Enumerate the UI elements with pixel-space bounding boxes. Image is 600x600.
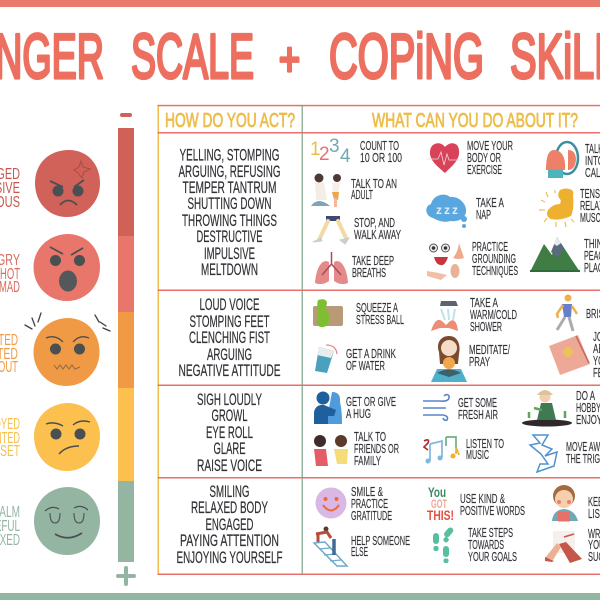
icon: footsteps	[433, 526, 455, 563]
icon: talk to adult	[311, 174, 341, 207]
behaviours: frustrated	[178, 296, 280, 380]
icon: you got this: You	[428, 484, 446, 500]
icon: nap cloud	[426, 195, 467, 228]
icon: journal	[549, 335, 590, 375]
face: annoyed	[34, 403, 100, 471]
text: move away from the trigger	[566, 440, 600, 466]
icon: gardening person	[522, 390, 572, 426]
text: move your body: MOVE YOUR	[467, 139, 513, 153]
text: grounding techniques	[472, 240, 518, 278]
icon: numbers 1234: 1	[310, 139, 321, 160]
title: SCALE	[131, 22, 254, 92]
text: hug: A HUG	[346, 407, 371, 421]
table frame and grid	[158, 105, 600, 575]
behaviours: frustrated: CLENCHING FIST	[189, 329, 270, 347]
text: help someone else	[351, 534, 410, 559]
text: journal about your feelings	[593, 330, 600, 380]
text: stop and walk away	[354, 216, 401, 242]
icon: numbers 1234: 3	[329, 136, 340, 157]
text: stop and walk away: STOP, AND	[354, 216, 395, 230]
text: meditate or pray	[469, 343, 510, 369]
level label: angry: HOT	[0, 266, 20, 283]
text: talk to friends or family	[354, 430, 399, 468]
text: warm or cold shower: WARM/COLD	[470, 308, 517, 322]
icon: numbers 1234: 4	[340, 146, 351, 167]
behaviours: annoyed: GROWL	[212, 407, 248, 425]
icon: muscle arm	[539, 188, 574, 227]
text: warm or cold shower	[470, 296, 517, 334]
icon: walking person	[557, 294, 577, 331]
icon: child	[552, 485, 578, 522]
text: deep breaths: TAKE DEEP	[352, 254, 394, 268]
text: kind and positive words	[460, 492, 525, 518]
icon: you got this	[427, 484, 454, 523]
face: frustrated	[25, 313, 110, 386]
scale minus sign	[120, 113, 132, 117]
behaviours: frustrated: LOUD VOICE	[200, 296, 260, 314]
behaviours: annoyed: GLARE	[214, 440, 246, 458]
text: deep breaths: BREATHS	[352, 266, 386, 280]
text: squeeze a stress ball	[356, 301, 404, 327]
icon: you got this: THIS!	[427, 507, 454, 523]
behaviours: annoyed	[197, 391, 262, 475]
icon: nap cloud: zzz	[436, 203, 458, 217]
text: talk to friends or family: FRIENDS OR	[354, 442, 399, 456]
text: squeeze a stress ball: STRESS BALL	[356, 313, 404, 327]
text: steps towards your goals: TAKE STEPS	[468, 526, 513, 540]
text: help someone else: HELP SOMEONE	[351, 534, 410, 548]
anger scale bar	[118, 128, 134, 562]
icon: smiley	[316, 488, 346, 518]
title	[0, 22, 600, 92]
text: steps towards your goals: YOUR GOALS	[468, 550, 517, 564]
text: move your body: EXERCISE	[467, 163, 502, 177]
text: warm or cold shower: TAKE A	[470, 296, 498, 310]
icon: fresh air wind	[423, 394, 449, 420]
behaviours: enraged and angry	[178, 146, 280, 279]
text: listen to music: LISTEN TO	[466, 437, 504, 451]
icon: shower	[431, 301, 458, 331]
icon: talking friends	[314, 435, 348, 466]
text: move your body	[467, 139, 513, 177]
text: do a hobby you enjoy	[576, 389, 600, 427]
text: meditate or pray: MEDITATE/	[469, 343, 510, 357]
text: listen to music: MUSIC	[466, 448, 489, 462]
text: talk to an adult: ADULT	[351, 188, 373, 202]
text: kind and positive words: USE KIND &	[460, 492, 505, 506]
title: +	[279, 33, 300, 85]
text: hug	[346, 395, 396, 421]
behaviours: enraged and angry: YELLING, STOMPING	[180, 146, 280, 164]
icon: water bottle	[315, 345, 337, 373]
text: listen to music	[466, 437, 504, 462]
text: drink of water: OF WATER	[346, 359, 385, 373]
behaviours: enraged and angry: THROWING THINGS	[182, 212, 277, 230]
text: move your body: BODY OR	[467, 151, 501, 165]
text: steps towards your goals	[468, 526, 517, 564]
title: COPiNG	[329, 22, 484, 92]
text: count: 10 OR 100	[360, 151, 402, 165]
text: deep breaths	[352, 254, 394, 280]
icon: meditating person	[431, 336, 467, 382]
icon: lungs	[315, 252, 348, 284]
behaviours: annoyed: RAISE VOICE	[197, 457, 262, 475]
level label: angry: MAD	[0, 279, 20, 296]
behaviours: calm: ENGAGED	[206, 516, 254, 534]
icon: numbers 1234	[310, 136, 351, 167]
text: talk yourself into being calm	[585, 142, 600, 180]
text: smile and gratitude: GRATITUDE	[351, 509, 392, 523]
behaviours: calm	[176, 483, 282, 567]
text: smile and gratitude: PRACTICE	[351, 497, 388, 511]
behaviours: frustrated: NEGATIVE ATTITUDE	[178, 362, 280, 380]
icon: writing hands	[545, 531, 582, 563]
behaviours: calm: PAYING ATTENTION	[180, 532, 279, 550]
behaviours: enraged and angry: SHUTTING DOWN	[188, 195, 272, 213]
level label: calm	[0, 504, 20, 549]
behaviours: frustrated: ARGUING	[207, 346, 252, 364]
behaviours: annoyed: SIGH LOUDLY	[197, 391, 262, 409]
text: grounding techniques: PRACTICE	[472, 240, 508, 254]
text: take a nap: TAKE A	[476, 196, 504, 210]
behaviours: enraged and angry: TEMPER TANTRUM	[182, 179, 276, 197]
text: smile and gratitude	[351, 485, 392, 523]
face: calm	[34, 487, 100, 555]
text: steps towards your goals: TOWARDS	[468, 538, 504, 552]
icon: you got this: GOT	[431, 497, 447, 511]
top banner bar	[0, 0, 600, 7]
icon: music notes	[424, 437, 459, 464]
icon: grounding senses	[427, 243, 464, 280]
heading: how do you act: HOW DO YOU ACT?	[165, 110, 295, 132]
text: squeeze a stress ball: SQUEEZE A	[356, 301, 398, 315]
icon: walking legs	[313, 216, 349, 244]
behaviours: enraged and angry: ARGUING, REFUSING	[178, 163, 280, 181]
text: count	[360, 139, 402, 165]
level label: angry	[0, 252, 20, 296]
text: kind and positive words: POSITIVE WORDS	[460, 504, 525, 518]
text: talk to an adult: TALK TO AN	[351, 177, 397, 191]
text: drink of water	[346, 347, 396, 373]
behaviours: calm: RELAXED BODY	[191, 499, 268, 517]
text: tense and relax muscles	[580, 187, 600, 225]
text: count: COUNT TO	[360, 139, 399, 153]
text: keep listening	[588, 495, 600, 521]
level label: frustrated	[0, 332, 18, 376]
behaviours: enraged and angry: DESTRUCTIVE	[196, 228, 262, 246]
icon: hug	[314, 392, 342, 424]
text: fresh air: FRESH AIR	[458, 408, 498, 422]
icon: climber helping on ladder	[314, 526, 347, 566]
face: angry	[34, 234, 100, 301]
scale plus sign	[118, 568, 134, 584]
text: fresh air: GET SOME	[458, 396, 497, 410]
bottom banner bar	[0, 593, 600, 600]
text: take a nap: NAP	[476, 208, 491, 222]
text: think of a peaceful place	[584, 237, 600, 275]
icon: heart	[427, 143, 462, 173]
text: talk to an adult	[351, 177, 397, 202]
text: meditate or pray: PRAY	[469, 355, 490, 369]
text: talk to friends or family: FAMILY	[354, 454, 381, 468]
text: grounding techniques: TECHNIQUES	[472, 264, 518, 278]
level label: annoyed	[0, 416, 20, 460]
text: take a nap	[476, 196, 504, 222]
face: enraged	[35, 150, 100, 217]
text: talk to friends or family: TALK TO	[354, 430, 386, 444]
behaviours: calm: SMILING	[210, 483, 250, 501]
text: help someone else: ELSE	[351, 545, 368, 559]
text: smile and gratitude: SMILE &	[351, 485, 383, 499]
text: drink of water: GET A DRINK	[346, 347, 396, 361]
behaviours: enraged and angry: MELTDOWN	[201, 261, 258, 279]
text: grounding techniques: GROUNDING	[472, 252, 516, 266]
icon: lightning arrow	[530, 435, 557, 472]
behaviours: calm: ENJOYING YOURSELF	[176, 549, 282, 567]
behaviours: enraged and angry: IMPULSIVE	[204, 245, 255, 263]
text: warm or cold shower: SHOWER	[470, 320, 502, 334]
behaviours: annoyed: EYE ROLL	[206, 424, 253, 442]
level label: enraged	[0, 166, 20, 211]
icon: mountains	[530, 237, 580, 272]
text: hug: GET OR GIVE	[346, 395, 396, 409]
text: write your successes	[588, 527, 600, 564]
icon: numbers 1234: 2	[319, 144, 330, 165]
icon: mirror self talk	[546, 142, 578, 178]
text: stop and walk away: WALK AWAY	[354, 228, 401, 242]
icon: stress ball	[313, 299, 343, 327]
behaviours: frustrated: STOMPING FEET	[190, 313, 270, 331]
text: fresh air	[458, 396, 498, 422]
